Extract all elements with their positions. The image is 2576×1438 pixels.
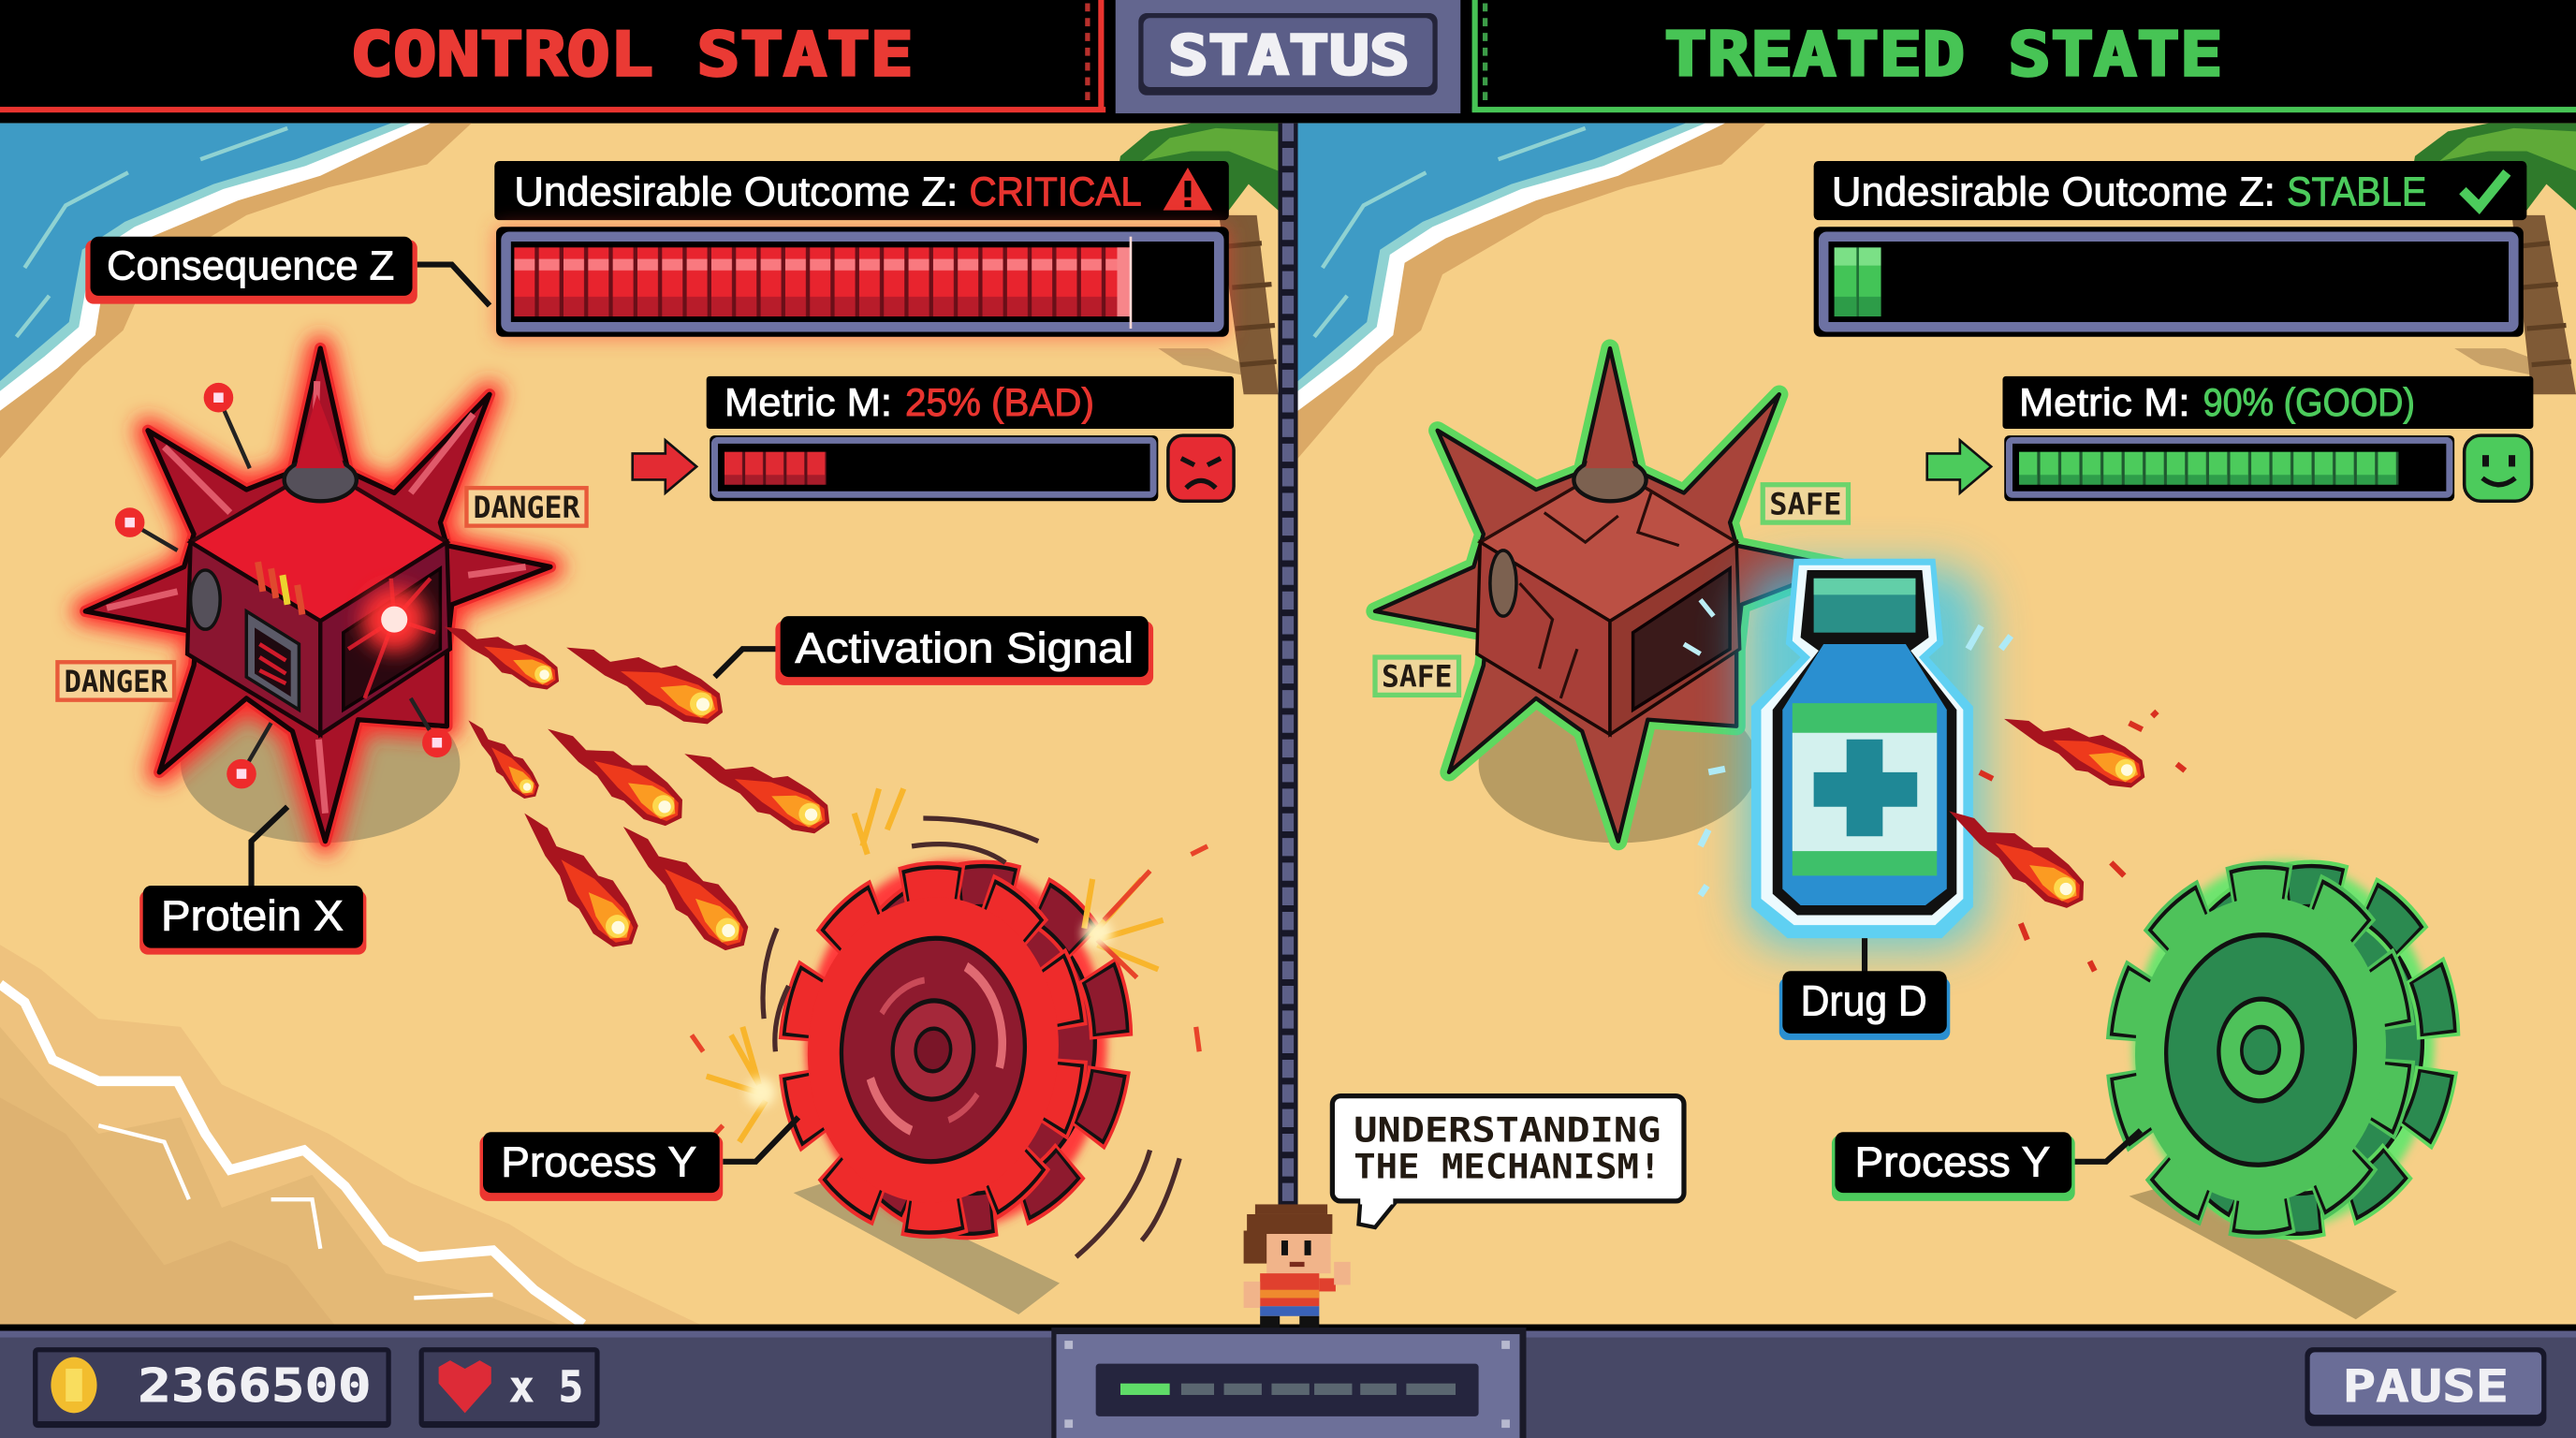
label: consequence Z: Consequence Z [107,242,394,288]
hair [1255,1204,1327,1214]
bottle cap [1814,579,1915,633]
bottle green contents [1793,703,1937,875]
spiked body [85,348,550,842]
gear: process Y calm [2115,869,2460,1319]
label: protein X: Protein X [161,891,344,939]
lives panel [419,1347,600,1428]
cube top [191,466,446,621]
label: protein X [139,807,366,955]
jeans [1260,1306,1319,1316]
header: control state [0,0,1105,115]
header: status plate [1116,0,1460,113]
label: undesirable outcome stable [1814,161,2526,220]
arrow: green [1927,440,1991,493]
shirt [1260,1273,1319,1306]
speech bubble [1332,1096,1684,1227]
cube right inactive [1610,542,1740,734]
icon: coin [51,1357,97,1413]
pause button: PAUSE [2343,1361,2509,1413]
coin score panel: 2366500 [138,1358,372,1413]
medical cross [1814,740,1917,836]
tag: danger lower: DANGER [64,666,168,699]
label: metric M bad [707,376,1234,429]
tag: danger upper: DANGER [473,492,581,525]
coin score panel [33,1347,391,1428]
gear glow [822,881,1090,1210]
sparkles [1701,626,2011,895]
glow [85,348,550,842]
label: consequence Z [85,237,490,305]
panel: treated scene background [1288,124,2576,1328]
glowing core screen [344,568,440,710]
protein shadow [181,685,460,843]
cube right face [320,542,450,734]
connector [417,265,490,305]
bottle label [1793,733,1937,851]
character: pixel kid [1244,1204,1351,1328]
ocean top left treated [1298,124,1766,459]
blocked signal fireballs [1937,698,2185,971]
ocean top left [0,124,472,459]
protein X active [85,348,550,843]
spiked body inactive [1375,348,1840,842]
progress indicator [1096,1364,1479,1416]
label: metric M good: 90% (GOOD) [2203,380,2415,424]
gear front [787,876,1079,1224]
status label: STATUS [1168,23,1410,87]
dead screen [1633,568,1730,710]
tag: safe lower: SAFE [1382,661,1453,695]
green outline [1375,348,1840,842]
label: process Y control: Process Y [501,1138,696,1186]
icon: warning triangle [1164,168,1212,211]
label: undesirable outcome critical: Undesirable Outcome Z: [514,169,958,214]
lives panel: x 5 [509,1362,583,1412]
collar inactive [1573,459,1647,501]
title: control state: CONTROL STATE [350,21,914,91]
pause button [2305,1347,2546,1426]
drug D bottle [1701,559,2011,948]
gear back teeth treated [2147,869,2460,1231]
label: drug D: Drug D [1801,977,1927,1025]
bottle glow [1745,566,1983,948]
centre divider [1278,124,1298,1208]
bottom HUD bar [0,1325,2576,1438]
icon: palm tree right [2408,124,2576,394]
bottle halo [1751,559,1973,938]
tag: safe upper: SAFE [1769,488,1841,521]
arrow: red [633,440,696,493]
label: process Y control [479,1117,798,1201]
cube left inactive [1477,542,1610,734]
label: undesirable outcome stable: STABLE [2287,169,2426,214]
bar: outcome Z stable [1814,227,2524,337]
icon: palm tree left [1114,124,1278,394]
cracks [1519,493,1679,698]
cube left face [187,542,320,734]
bottle neck and blue glass [1782,644,1947,905]
title: treated state: TREATED STATE [1664,21,2223,91]
gear glow treated [2149,881,2419,1210]
label: process Y treated [1832,1130,2141,1201]
label: process Y treated: Process Y [1855,1138,2050,1186]
sparks [707,788,1164,1142]
header: treated state [1472,0,2576,115]
label: metric M bad: Metric M: [724,380,892,424]
wet sand bottom left [0,945,707,1328]
gear: process Y active [692,788,1208,1314]
label: drug D [1779,938,1950,1040]
bar: metric M bad [710,435,1158,501]
vent lights [258,562,276,598]
panel: control scene background [0,124,1288,1328]
label: activation signal: Activation Signal [795,624,1134,671]
spike highlights [107,381,526,814]
gear shadow treated [2130,1184,2397,1319]
bottle outline [1773,570,1956,916]
motion arcs [763,818,1179,1257]
bar: outcome Z critical [496,227,1229,339]
gear front treated [2115,876,2407,1224]
cube top inactive [1480,466,1736,621]
label: metric M good: Metric M: [2019,380,2190,424]
speech bubble: THE MECHANISM! [1354,1146,1661,1186]
control panel [246,611,299,710]
label: undesirable outcome critical [494,161,1229,220]
label: undesirable outcome stable: Undesirable Outcome Z: [1832,169,2276,214]
gear back teeth [820,869,1132,1231]
collars [285,459,357,501]
centre plate [1051,1328,1526,1438]
icon: angry face [1168,435,1234,501]
arms [1244,1282,1260,1308]
face [1266,1234,1331,1273]
label: metric M good [2002,376,2533,429]
surf line bottom left [0,984,583,1325]
bar: metric M good [2004,435,2454,501]
icon: heart [439,1360,491,1413]
protein shadow treated [1479,685,1758,843]
label: metric M bad: 25% (BAD) [905,380,1094,424]
status lights [130,398,437,774]
activation signal fireballs [436,610,840,962]
icon: happy face [2465,435,2532,501]
protein X inactive [1375,348,1840,843]
label: undesirable outcome critical: CRITICAL [970,169,1142,214]
gear shadow [794,1178,1060,1314]
speech bubble: UNDERSTANDING [1354,1110,1661,1151]
icon: check mark [2463,172,2507,207]
label: activation signal [714,616,1153,685]
